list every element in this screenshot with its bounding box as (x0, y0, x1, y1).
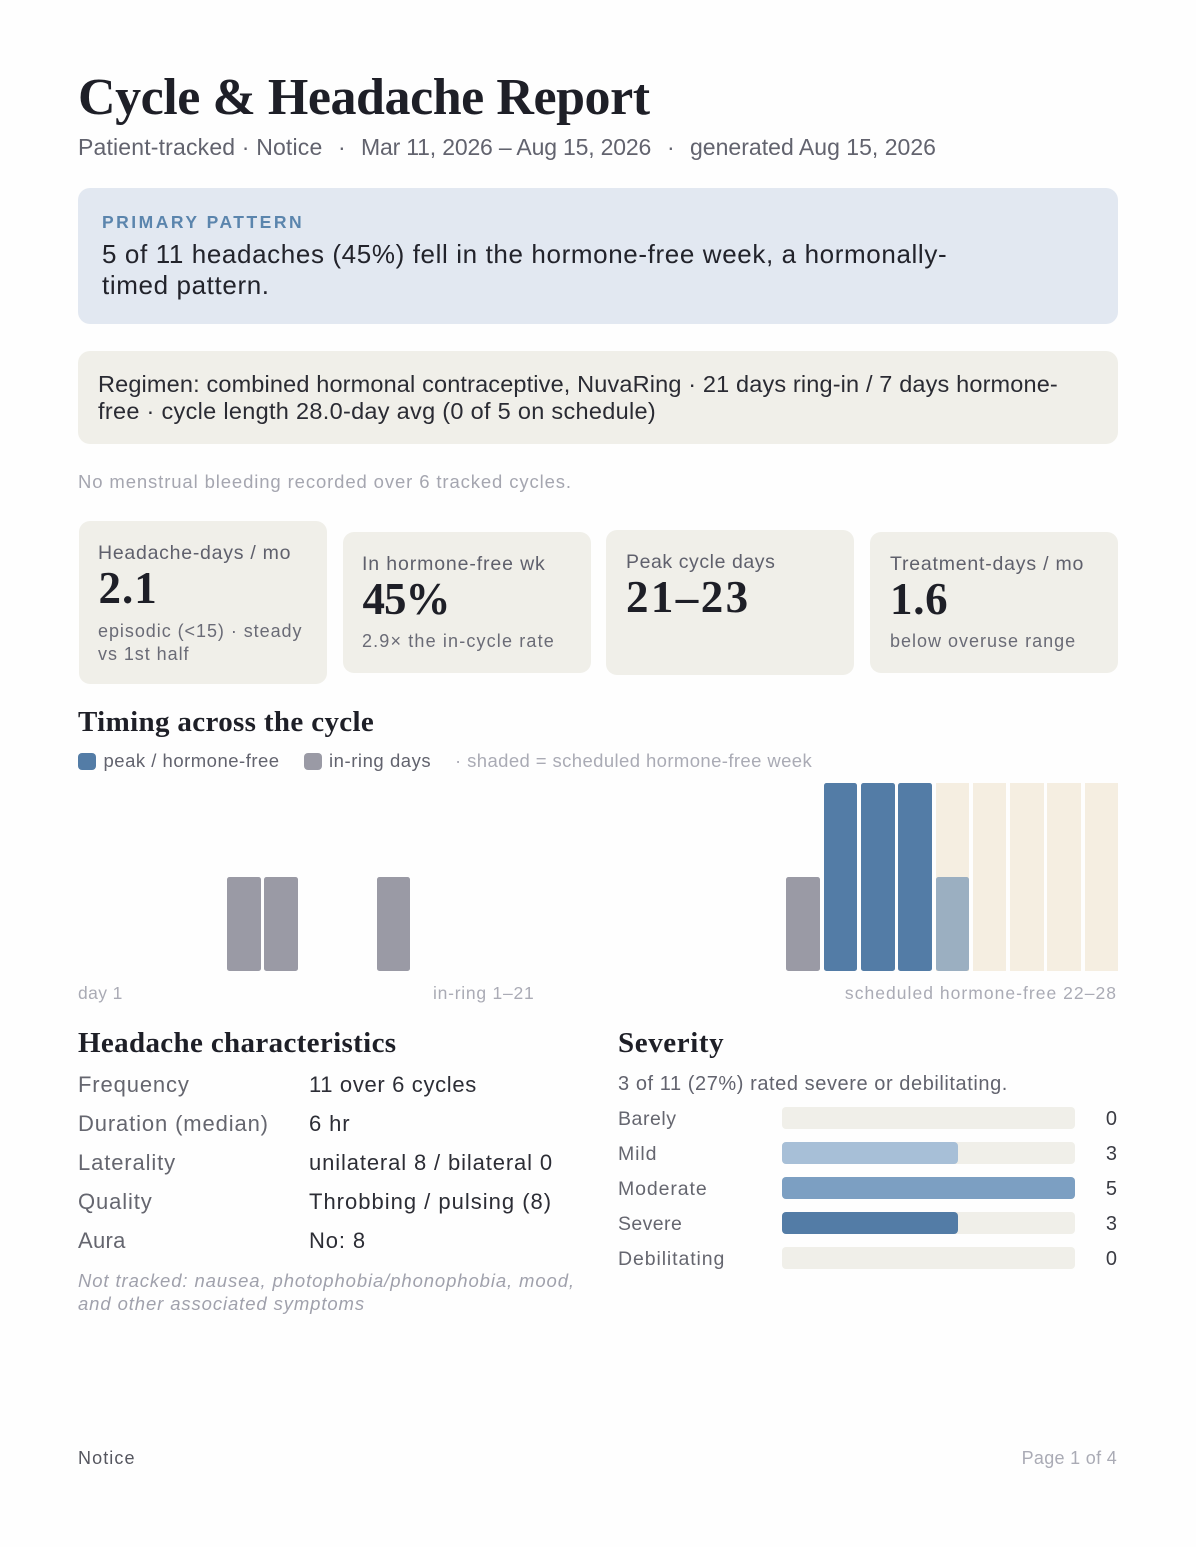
row: laterality: Laterality (78, 1150, 176, 1175)
title: Cycle & Headache Report (78, 69, 650, 126)
bar chart: severity: 3 (1106, 1213, 1117, 1235)
row: moderate: Moderate (618, 1178, 708, 1200)
label: Treatment-days / mo (890, 553, 1084, 575)
axis caption: day 1: day 1 (78, 983, 123, 1003)
row: mild: Mild (618, 1143, 657, 1165)
regimen text (98, 371, 1058, 424)
hormone-free low bar (936, 877, 969, 971)
table: characteristics (78, 1072, 553, 1253)
row: debilitating: Debilitating (618, 1248, 725, 1270)
note: 2.9× the in-cycle rate (362, 631, 555, 651)
legend swatch: peak (78, 753, 96, 770)
heading: headache characteristics: Headache characteristics (78, 1027, 396, 1059)
subtitle: source and dates: Patient-tracked · Notice (78, 134, 322, 160)
subtitle: source and dates: Mar 11, 2026 – Aug 15, 2026 (361, 134, 651, 160)
footer: left label: Notice (78, 1448, 136, 1468)
label: Peak cycle days (626, 551, 775, 573)
primary pattern statement (102, 239, 947, 300)
in-ring bars (227, 877, 261, 971)
stat card: treatment-days (870, 532, 1118, 673)
panel: primary pattern (78, 188, 1118, 324)
primary pattern label: PRIMARY PATTERN (102, 212, 304, 232)
stat card: headache-days (78, 521, 326, 684)
subtitle: source and dates: · (667, 134, 675, 160)
table: characteristics: 11 over 6 cycles (309, 1072, 477, 1097)
legend label: in-ring: in-ring days (329, 750, 431, 771)
severity summary: 3 of 11 (27%) rated severe or debilitating. (618, 1073, 1008, 1095)
subtitle: source and dates: generated Aug 15, 2026 (690, 134, 936, 160)
row: duration: Duration (median) (78, 1111, 269, 1136)
table: characteristics: 6 hr (309, 1111, 350, 1136)
legend swatch: in-ring (304, 753, 322, 770)
note: not tracked symptoms: Not tracked: nausea, photophobia/phonophobia, mood, (78, 1270, 575, 1291)
row: frequency: Frequency (78, 1072, 190, 1097)
table: characteristics: No: 8 (309, 1228, 366, 1253)
subtitle: source and dates: · (338, 134, 346, 160)
footer: page number: Page 1 of 4 (1022, 1448, 1117, 1468)
shaded hormone-free bars (936, 783, 969, 971)
legend label: peak: peak / hormone-free (104, 750, 280, 771)
heading: severity: Severity (618, 1027, 724, 1059)
bar chart: timing by cycle day (78, 783, 1118, 1003)
note (98, 621, 302, 664)
note: no bleeding recorded: No menstrual bleeding recorded over 6 tracked cycles. (78, 471, 572, 492)
peak bars (824, 783, 857, 971)
note: not tracked symptoms: and other associated symptoms (78, 1293, 365, 1314)
row: quality: Quality (78, 1189, 153, 1214)
table: characteristics: unilateral 8 / bilateral 0 (309, 1150, 553, 1175)
bar chart: severity: 0 (1106, 1248, 1117, 1270)
row: barely: Barely (618, 1108, 677, 1130)
note: not tracked symptoms (78, 1270, 575, 1314)
value: 2.1 (98, 563, 158, 613)
bar chart: severity: 0 (1106, 1108, 1117, 1130)
legend note: shaded: · shaded = scheduled hormone-free week (455, 750, 812, 771)
regimen text: free · cycle length 28.0-day avg (0 of 5 on schedule) (98, 398, 656, 424)
row: aura: Aura (78, 1228, 126, 1253)
axis caption: scheduled hormone-free: scheduled hormone-free 22–28 (845, 983, 1117, 1003)
heading: timing across the cycle: Timing across the cycle (78, 706, 374, 738)
note: vs 1st half (98, 644, 190, 664)
subtitle: source and dates (78, 134, 936, 160)
legend (78, 750, 812, 771)
note: episodic (<15) · steady (98, 621, 302, 641)
value: 1.6 (890, 574, 948, 624)
value: 21–23 (626, 572, 750, 622)
bar chart: severity: 3 (1106, 1143, 1117, 1165)
axis caption: in-ring: in-ring 1–21 (433, 983, 534, 1003)
table: characteristics: Throbbing / pulsing (8) (309, 1189, 552, 1214)
value: 45% (362, 574, 450, 624)
label: Headache-days / mo (98, 542, 291, 564)
stat card: hormone-free week (342, 532, 590, 673)
regimen text: Regimen: combined hormonal contraceptive, NuvaRing · 21 days ring-in / 7 days hormone- (98, 371, 1058, 397)
primary pattern statement: timed pattern. (102, 270, 270, 300)
bar chart: severity: 5 (1106, 1178, 1117, 1200)
primary pattern statement: 5 of 11 headaches (45%) fell in the hormone-free week, a hormonally- (102, 239, 947, 269)
label: In hormone-free wk (362, 553, 546, 575)
row: severe: Severe (618, 1213, 682, 1235)
stat card: peak cycle days (606, 530, 854, 675)
panel: regimen (78, 351, 1118, 444)
note: below overuse range (890, 631, 1076, 651)
